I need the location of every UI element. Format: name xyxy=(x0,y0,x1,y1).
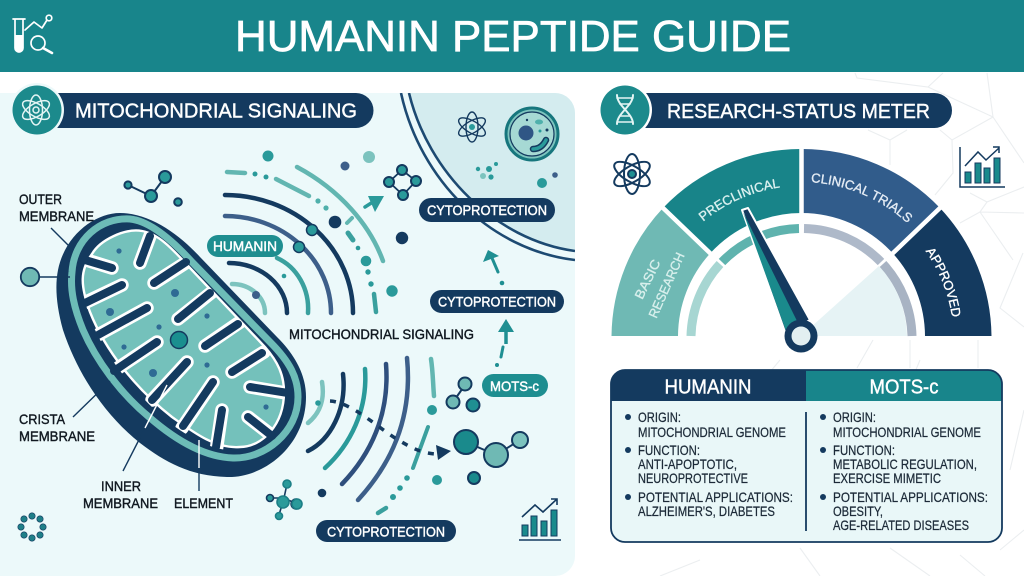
pill: cytoprotection middle xyxy=(430,290,564,313)
column: humanin: POTENTIAL APPLICATIONS: xyxy=(638,489,793,505)
title: HUMANIN PEPTIDE GUIDE xyxy=(235,12,791,61)
molecule: bottom xyxy=(266,480,302,520)
column: humanin: FUNCTION: xyxy=(638,442,700,458)
icon: bar chart right xyxy=(960,147,1005,187)
central granule xyxy=(170,332,188,348)
column: mots-c: OBESITY, xyxy=(833,503,883,519)
pill: humanin: HUMANIN xyxy=(213,238,277,254)
column: mots-c xyxy=(820,409,988,533)
icon: atom small xyxy=(456,112,488,142)
leader lines xyxy=(21,228,199,491)
highlighted wedge xyxy=(801,266,907,336)
labels: mitochondrion parts: MEMBRANE xyxy=(83,495,158,511)
gauge labels: APPROVED xyxy=(925,248,960,316)
labels: mitochondrion parts: MITOCHONDRIAL SIGNALING xyxy=(289,326,474,342)
gauge labels: CLINICAL TRIALS xyxy=(812,173,912,222)
column: mots-c: MITOCHONDRIAL GENOME xyxy=(833,424,981,440)
segment: preclinical xyxy=(663,149,802,253)
dashed arrow xyxy=(330,401,451,460)
column: mots-c: FUNCTION: xyxy=(833,442,895,458)
gauge labels xyxy=(632,173,960,320)
inner ring xyxy=(691,228,912,336)
heading: mitochondrial signaling: MITOCHONDRIAL SIGNALING xyxy=(75,100,357,122)
heading: research-status meter xyxy=(598,83,952,137)
lower dots xyxy=(291,400,442,509)
column: mots-c: ORIGIN: xyxy=(833,409,876,425)
segment: approved xyxy=(892,208,992,336)
labels: mitochondrion parts: ELEMENT xyxy=(174,495,233,511)
labels: mitochondrion parts: MEMBRANE xyxy=(19,208,94,224)
comparison table xyxy=(611,370,1002,542)
icon: ring of dots xyxy=(18,513,46,541)
pill: humanin xyxy=(207,235,283,257)
needle xyxy=(742,208,818,352)
icon: atom xyxy=(611,154,653,194)
lower signal arcs xyxy=(308,358,434,513)
pill: mots-c: MOTS-c xyxy=(490,378,539,394)
header bar xyxy=(0,0,1024,72)
column: humanin: ANTI-APOPTOTIC, xyxy=(638,456,737,472)
gauge labels: BASIC xyxy=(632,257,663,301)
labels: mitochondrion parts: OUTER xyxy=(19,191,62,207)
column: humanin: MITOCHONDRIAL GENOME xyxy=(638,424,786,440)
pill: mots-c xyxy=(482,374,548,397)
mitochondrion xyxy=(56,213,306,477)
pill: cytoprotection lower xyxy=(316,520,456,542)
column: mots-c: EXERCISE MIMETIC xyxy=(833,470,941,486)
column: mots-c: AGE-RELATED DISEASES xyxy=(833,517,969,533)
molecule: large xyxy=(454,430,528,484)
labels: mitochondrion parts: INNER xyxy=(101,478,141,494)
heading: research-status meter: RESEARCH-STATUS METER xyxy=(667,101,930,123)
icon: cell xyxy=(506,108,558,160)
labels: mitochondrion parts xyxy=(19,191,474,511)
pill: cytoprotection upper xyxy=(419,198,555,222)
upper signal arcs xyxy=(225,167,383,313)
column: humanin: ORIGIN: xyxy=(638,409,681,425)
pill: cytoprotection middle: CYTOPROTECTION xyxy=(438,294,556,310)
panel: mitochondrial signaling xyxy=(0,93,575,576)
arrows: upward dashed path xyxy=(483,250,514,367)
gauge labels: RESEARCH xyxy=(645,250,688,320)
column: humanin: ALZHEIMER'S, DIABETES xyxy=(638,503,775,519)
icon: test tube and magnifier xyxy=(13,15,52,53)
matrix granules xyxy=(106,248,269,410)
table header: mots-c: MOTS-c xyxy=(870,376,938,398)
pill: cytoprotection lower: CYTOPROTECTION xyxy=(327,524,445,540)
labels: mitochondrion parts: CRISTA xyxy=(19,411,66,427)
gauge labels: PRECLINICAL xyxy=(698,179,780,222)
gauge xyxy=(612,149,992,352)
segment: clinical trials xyxy=(802,149,940,253)
heading: mitochondrial signaling xyxy=(10,83,374,137)
pill: cytoprotection upper: CYTOPROTECTION xyxy=(427,202,547,218)
labels: mitochondrion parts: MEMBRANE xyxy=(19,428,95,444)
cell region xyxy=(401,93,575,260)
cell dots xyxy=(476,162,558,188)
molecule: upper ring xyxy=(384,165,421,200)
molecule: small cluster xyxy=(446,378,480,412)
signal dots and arrow xyxy=(252,150,408,299)
molecule: upper left xyxy=(124,171,182,206)
column: mots-c: POTENTIAL APPLICATIONS: xyxy=(833,489,988,505)
column: mots-c: METABOLIC REGULATION, xyxy=(833,456,977,472)
segment: basic research xyxy=(612,208,710,336)
icon: bar chart left xyxy=(519,499,561,540)
column: humanin: NEUROPROTECTIVE xyxy=(638,470,748,486)
column: humanin xyxy=(625,409,793,519)
table header: humanin: HUMANIN xyxy=(664,376,752,398)
